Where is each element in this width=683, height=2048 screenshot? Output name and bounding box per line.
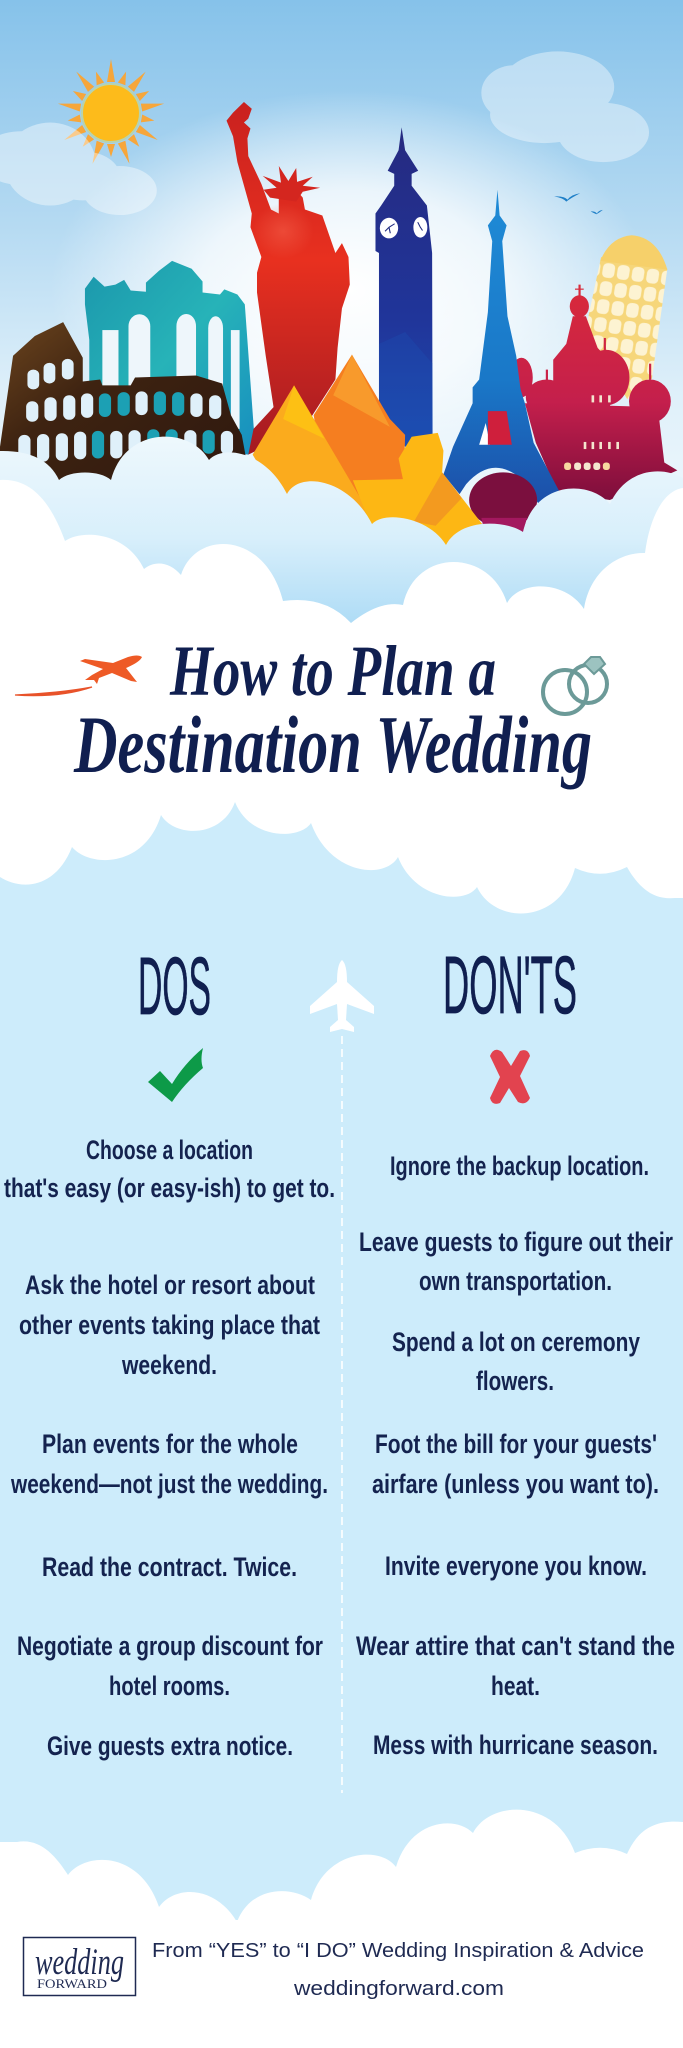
item: negotiate discount: hotel rooms. (109, 1671, 230, 1701)
icon: sun (57, 59, 165, 165)
icon: orange airplane with trail (15, 656, 142, 696)
item: ask the hotel: weekend. (121, 1350, 217, 1380)
cloud: pale back layer (0, 437, 683, 640)
windows of the Colosseum (18, 359, 233, 463)
icon: left sky cloud (0, 123, 157, 215)
icon: St Basil's cathedral (510, 285, 677, 500)
item: foot the bill (372, 1429, 659, 1499)
item: plan events: Plan events for the whole (42, 1429, 298, 1459)
infographic: DOS (138, 941, 211, 1032)
icon: maroon dome (469, 472, 537, 534)
item: spend on flowers: flowers. (476, 1366, 554, 1396)
sky background (0, 0, 683, 640)
item: spend on flowers (392, 1327, 640, 1396)
item: negotiate discount: Negotiate a group discount for (17, 1631, 323, 1661)
icon: white airplane and dashed flight path (310, 960, 374, 1793)
icon: Eiffel Tower (443, 190, 560, 506)
panel: dos list (4, 1135, 335, 1761)
icon: Statue of Liberty (227, 102, 350, 455)
illustration: world landmarks skyline (0, 51, 677, 547)
icon: right sky cloud (481, 51, 649, 162)
item: ask the hotel: other events taking place that (19, 1310, 320, 1340)
icon: Big Ben clock tower (375, 127, 433, 447)
cloud: white title cloud (0, 480, 683, 913)
icon: orange pyramid (314, 355, 405, 514)
item: leave guests: own transportation. (419, 1266, 612, 1296)
cathedral windows (564, 395, 619, 470)
icon: birds (554, 193, 603, 214)
item: choose a location: Choose a location (86, 1135, 253, 1165)
clock faces (380, 217, 427, 238)
item: ask the hotel (19, 1270, 320, 1380)
item: give notice: Give guests extra notice. (47, 1731, 293, 1761)
panel: blue body background (0, 620, 683, 1920)
icon: green check mark (148, 1048, 203, 1102)
icon: leaning tower of Pisa (586, 235, 667, 399)
icon: teal Roman monument (85, 261, 255, 455)
item: read the contract: Read the contract. Twice. (42, 1552, 297, 1582)
item: choose a location (4, 1135, 335, 1203)
item: leave guests (359, 1227, 673, 1296)
item: wear attire: heat. (491, 1671, 540, 1701)
icon: Colosseum (0, 322, 246, 514)
item: plan events: weekend—not just the wedding. (10, 1469, 328, 1499)
title (73, 631, 592, 790)
logo: wedding forward: FORWARD (37, 1976, 107, 1991)
item: plan events (10, 1429, 328, 1499)
footer text: website: weddingforward.com (293, 1978, 504, 2000)
logo: wedding forward (24, 1938, 136, 1996)
cloud: footer white cloud (0, 1810, 683, 2048)
item: negotiate discount (17, 1631, 323, 1701)
title: How to Plan a (169, 631, 496, 711)
icon: sphinx (353, 433, 484, 547)
item: choose a location: that's easy (or easy-ish) to get to. (4, 1173, 335, 1203)
icon: yellow pyramid (253, 385, 379, 530)
panel: don'ts list (356, 1151, 675, 1760)
logo: wedding forward: wedding (35, 1942, 124, 1983)
icon: red cross (490, 1050, 530, 1104)
icon: wedding rings (543, 657, 607, 714)
footer text: tagline: From “YES” to “I DO” Wedding Inspiration & Advice (152, 1940, 644, 1962)
item: ask the hotel: Ask the hotel or resort about (25, 1270, 315, 1300)
item: wear attire (356, 1631, 675, 1701)
